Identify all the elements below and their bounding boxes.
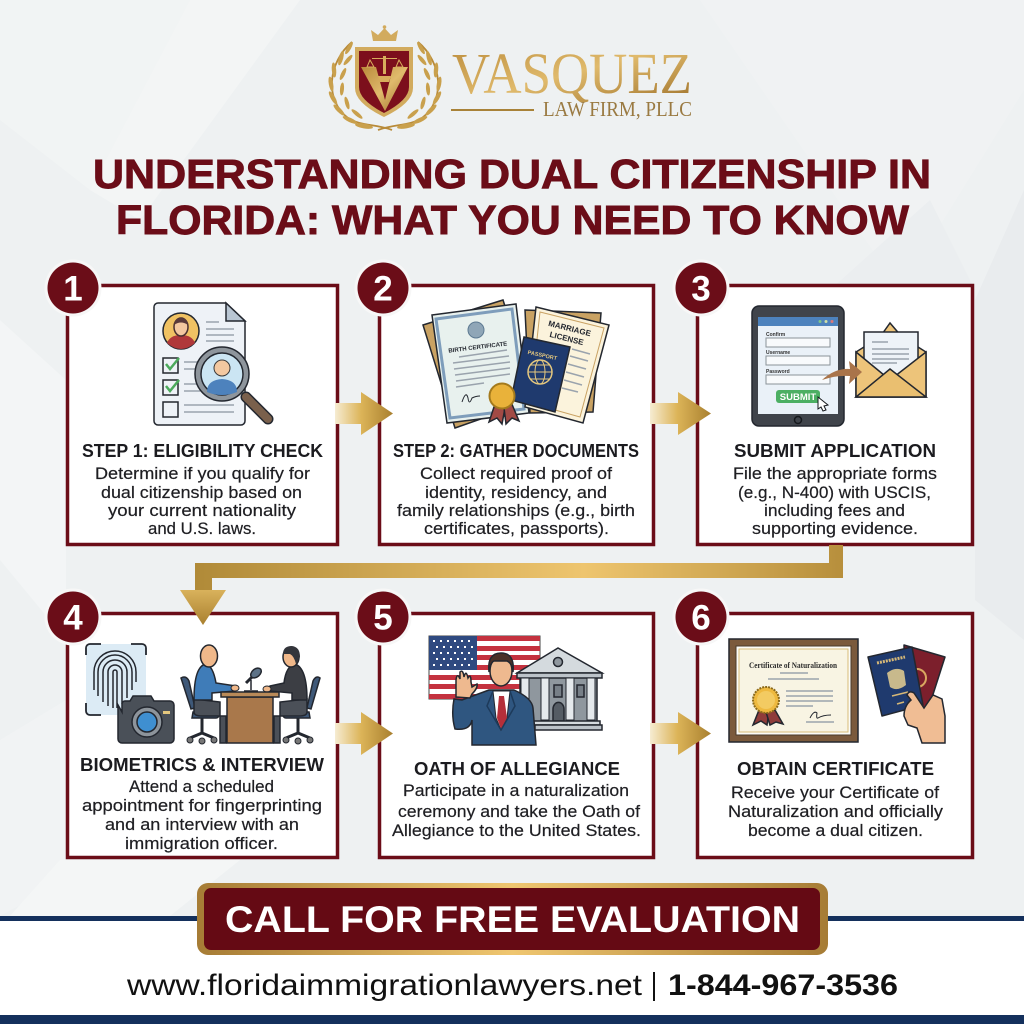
step 5 description: [392, 782, 641, 840]
step 5 heading: OATH OF ALLEGIANCE: [414, 759, 620, 779]
logo emblem: wreath, shield and crown: [327, 25, 443, 130]
step 6 description: Receive your Certificate of: [731, 784, 939, 802]
contact line: 1-844-967-3536: [668, 969, 898, 1002]
icon: framed certificate: [729, 639, 858, 742]
icon: person taking oath: [453, 653, 536, 745]
panel frame: [68, 286, 338, 544]
logo: Vasquez Law Firm: [327, 25, 692, 130]
step number badge 4: 4: [63, 598, 83, 638]
step number badge 1: [44, 260, 102, 316]
step 5 description: Participate in a naturalization: [403, 782, 629, 800]
panel: step 5 oath of allegiance: [354, 588, 654, 858]
arrow: step 5 to step 6: [650, 712, 711, 755]
step 4 heading: BIOMETRICS & INTERVIEW: [80, 755, 324, 775]
icon: certificates and passport: BIRTH CERTIFICATE: [448, 341, 508, 355]
step number badge 4: [44, 588, 102, 646]
contact line: [126, 969, 898, 1002]
logo subtitle: LAW FIRM, PLLC: [543, 97, 692, 121]
step 2 heading: STEP 2: GATHER DOCUMENTS: [393, 441, 639, 461]
step number badge 5: [354, 588, 412, 646]
step 3 description: (e.g., N-400) with USCIS,: [738, 484, 931, 502]
arrow: step 1 to step 2: [335, 392, 393, 435]
footer band: [0, 916, 1024, 1024]
panel: step 4 biometrics and interview: [44, 588, 338, 858]
step 4 description: [82, 778, 322, 853]
arrow: step 3 down and back to step 4: [180, 545, 843, 625]
step number badge 6: [672, 588, 730, 646]
step 1 description: and U.S. laws.: [148, 520, 256, 538]
icon: document with magnifying glass: [154, 303, 268, 425]
icon: government building: [517, 648, 602, 730]
title: [93, 151, 931, 243]
panel frame: [698, 614, 972, 858]
step 1 heading: STEP 1: ELIGIBILITY CHECK: [82, 441, 323, 461]
icon: tablet form and envelope: Confirm: [766, 332, 786, 338]
step 2 description: [397, 465, 635, 538]
logo rule: [451, 109, 534, 111]
icon: certificates and passport: LICENSE: [549, 330, 585, 347]
panel: step 3 submit application: [672, 260, 972, 544]
step 2 description: family relationships (e.g., birth: [397, 502, 635, 520]
step 1 description: Determine if you qualify for: [95, 465, 311, 483]
step number badge 2: [354, 260, 412, 316]
title: UNDERSTANDING DUAL CITIZENSHIP IN: [93, 151, 931, 197]
step 6 description: become a dual citizen.: [748, 822, 923, 840]
step 4 description: and an interview with an: [105, 816, 299, 834]
icon: tablet form and envelope: [752, 306, 926, 426]
step 6 heading: OBTAIN CERTIFICATE: [737, 759, 934, 779]
step 1 description: [95, 465, 311, 538]
step 2 description: certificates, passports).: [424, 520, 609, 538]
panel frame: [380, 614, 654, 858]
icon: interview at desk: [181, 645, 320, 744]
step 3 description: including fees and: [764, 502, 905, 520]
step 5 description: Allegiance to the United States.: [392, 822, 641, 840]
step 1 description: your current nationality: [108, 502, 297, 520]
icon: tablet form and envelope: SUBMIT: [780, 392, 816, 403]
icon: framed certificate: Certificate of Naturalization: [749, 660, 837, 670]
step 4 description: appointment for fingerprinting: [82, 797, 322, 815]
step number badge 3: 3: [691, 270, 711, 308]
step 2 description: Collect required proof of: [420, 465, 612, 483]
step number badge 3: [672, 260, 730, 316]
arrow: step 4 to step 5: [335, 712, 393, 755]
step 1 description: dual citizenship based on: [101, 484, 302, 502]
step 3 heading: SUBMIT APPLICATION: [734, 441, 936, 461]
panel: step 6 obtain certificate: [672, 588, 972, 858]
step 2 description: identity, residency, and: [425, 484, 607, 502]
contact line: www.floridaimmigrationlawyers.net: [126, 969, 643, 1002]
step 6 description: [728, 784, 944, 840]
step 3 description: [733, 465, 937, 538]
step 6 description: Naturalization and officially: [728, 803, 944, 821]
icon: certificates and passport: MARRIAGE: [547, 319, 592, 338]
step 4 description: Attend a scheduled: [129, 778, 274, 796]
step 5 description: ceremony and take the Oath of: [398, 803, 640, 821]
step number badge 2: 2: [373, 270, 393, 308]
arrow: step 2 to step 3: [650, 392, 711, 435]
title: FLORIDA: WHAT YOU NEED TO KNOW: [116, 197, 909, 243]
icon: fingerprint and camera: [86, 644, 174, 743]
call to action button: [197, 883, 828, 955]
step number badge 6: 6: [691, 598, 711, 638]
panel frame: [380, 286, 654, 544]
icon: hand holding two passports: [868, 645, 945, 743]
icon: certificates and passport: PASSPORT: [527, 350, 558, 362]
icon: certificates and passport: [423, 300, 609, 428]
panel frame: [68, 614, 338, 858]
step number badge 5: 5: [373, 598, 393, 638]
panel: step 2 gather documents: [354, 260, 654, 544]
panel: step 1 eligibility check: [44, 260, 338, 544]
step number badge 1: 1: [63, 270, 83, 308]
step 4 description: immigration officer.: [125, 835, 278, 853]
step 3 description: supporting evidence.: [752, 520, 918, 538]
call to action button: CALL FOR FREE EVALUATION: [225, 899, 800, 940]
icon: tablet form and envelope: Password: [766, 369, 790, 375]
step 3 description: File the appropriate forms: [733, 465, 937, 483]
icon: tablet form and envelope: Username: [766, 350, 790, 356]
panel frame: [698, 286, 972, 544]
icon: American flag: [429, 636, 540, 699]
logo wordmark: VASQUEZ: [452, 41, 692, 106]
